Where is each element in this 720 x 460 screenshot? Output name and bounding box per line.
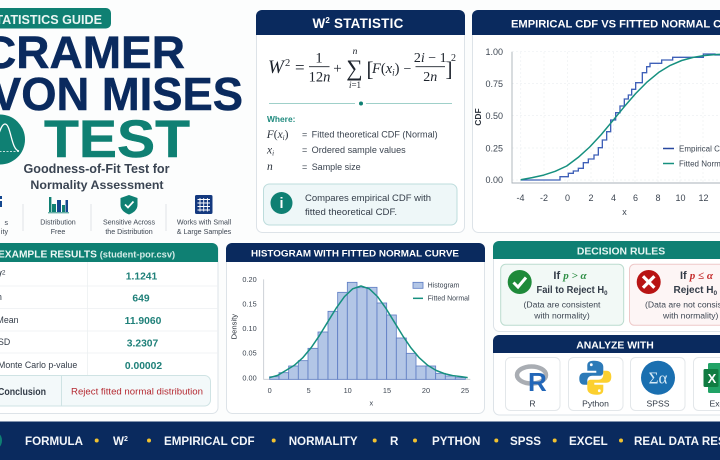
panel: histogram [226, 243, 485, 414]
rule: reject: with normality) [662, 310, 719, 320]
tool: SPSS: SPSS [647, 398, 670, 408]
feature: normality partial: s [4, 219, 8, 227]
title [0, 27, 243, 169]
rule: fail to reject: with normality) [533, 310, 590, 320]
x axis labels: -4 [516, 193, 525, 203]
subtitle: Goodness-of-Fit Test for [24, 162, 170, 176]
heading: empirical CDF vs fitted normal [472, 10, 720, 35]
feature: sensitive across the distribution: the Distribution [105, 228, 153, 236]
callout: compares CDFs [264, 184, 457, 225]
chart legend [663, 144, 720, 168]
formula: ] [446, 57, 452, 81]
results values: 1.1241 [126, 272, 158, 282]
banner keywords: W [113, 435, 124, 448]
y axis labels: 0.00 [485, 175, 503, 185]
x axis labels [268, 386, 469, 407]
y axis labels: 1.00 [485, 47, 503, 57]
tool: SPSS: Σα [649, 368, 667, 388]
y axis labels [242, 275, 257, 382]
where legend: i [283, 134, 285, 142]
formula: W [268, 57, 286, 78]
formula: 1 [315, 50, 323, 66]
where legend [266, 114, 438, 173]
tool: Python [568, 358, 623, 410]
histogram chart [230, 275, 470, 407]
formula: + [333, 61, 342, 77]
y axis labels: 0.20 [242, 275, 257, 284]
x axis labels: 8 [655, 193, 661, 203]
banner keywords [25, 435, 720, 448]
x axis labels: 20 [422, 386, 430, 395]
heading: histogram with fitted normal curve [226, 243, 485, 262]
badge: statistics guide [0, 8, 111, 28]
x axis labels: 12 [698, 193, 709, 203]
callout: compares CDFs: i [279, 196, 284, 212]
results rows: Monte Carlo p-value [0, 360, 77, 370]
formula: F(x [372, 61, 392, 77]
formula: i=1 [349, 80, 361, 90]
y axis labels: 0.25 [485, 144, 503, 154]
heading: example results: EXAMPLE RESULTS (student-por.csv) [0, 250, 175, 260]
feature: distribution free: Free [51, 228, 65, 236]
where legend: = [302, 130, 307, 140]
x axis labels: x [369, 398, 373, 407]
rule: fail to reject [501, 264, 624, 325]
rule: reject: 0 [714, 290, 718, 297]
y axis labels: 0.50 [485, 111, 503, 121]
y axis labels: 0.15 [242, 300, 257, 309]
heading: W2 statistic: STATISTIC [330, 16, 404, 31]
feature: sensitive across the distribution [103, 195, 155, 236]
heading: example results [0, 243, 218, 262]
heading: decision rules [493, 241, 720, 259]
feature: small and large samples [177, 195, 232, 236]
panel: W2 statistic [256, 10, 465, 232]
panel: empirical CDF chart [472, 10, 720, 232]
feature: small and large samples: & Large Samples [177, 228, 232, 236]
where legend: Ordered sample values [312, 145, 406, 155]
heading: W2 statistic: 2 [325, 16, 330, 25]
x axis labels: 5 [307, 386, 311, 395]
legend: Histogram [428, 283, 460, 290]
line chart: CDF: CDF [473, 108, 483, 126]
formula: 12n [309, 70, 330, 86]
x axis labels: 4 [611, 193, 616, 203]
rule: fail to reject: Fail to Reject H [536, 285, 609, 296]
where legend: = [302, 145, 307, 155]
where legend: Where: [267, 114, 295, 124]
rule: reject: Reject H [674, 285, 714, 296]
subtitle: Normality Assessment [30, 178, 164, 192]
footer banner [0, 422, 720, 460]
x axis labels: 2 [588, 193, 594, 203]
where legend: Fitted theoretical CDF (Normal) [312, 130, 438, 140]
formula: ) [395, 61, 400, 77]
x axis labels [516, 193, 709, 217]
where legend: n [267, 161, 273, 173]
results rows [0, 269, 77, 370]
panel: analyze with [493, 335, 720, 415]
banner keywords: FORMULA [25, 435, 84, 448]
heading: analyze with: ANALYZE WITH [576, 340, 654, 352]
histogram chart: Density [230, 314, 239, 339]
heading: decision rules: DECISION RULES [577, 246, 665, 258]
feature: distribution free [40, 197, 76, 236]
x axis labels: 0 [565, 193, 570, 203]
where legend: ) [285, 129, 289, 141]
results rows: 2 [2, 270, 6, 276]
tool: SPSS [630, 358, 685, 410]
formula: i [392, 68, 395, 78]
where legend: Sample size [312, 162, 361, 172]
formula: − [404, 62, 412, 77]
tool: R [506, 358, 560, 410]
fitted normal curve [269, 286, 468, 378]
formula: 2i − 1 [414, 51, 447, 66]
banner keywords: 2 [124, 436, 128, 443]
rule: reject [630, 264, 720, 325]
callout: compares CDFs: fitted theoretical CDF. [305, 207, 397, 218]
empirical step line [521, 54, 720, 180]
y axis labels: 0.00 [242, 373, 257, 382]
x axis labels: 15 [383, 386, 391, 395]
histogram bars [270, 282, 465, 379]
tool: R: R [529, 398, 536, 408]
x axis labels: 6 [633, 193, 638, 203]
formula: = [295, 58, 305, 77]
x axis labels: 10 [344, 386, 352, 395]
tool: Python: Python [582, 398, 609, 408]
legend: Fitted Normal [428, 296, 470, 303]
banner separators [95, 438, 623, 442]
results values: 3.2307 [127, 338, 159, 350]
results values: 649 [132, 294, 150, 304]
results values: 11.9060 [125, 316, 162, 327]
heading: W2 statistic [256, 10, 465, 35]
banner keywords: R [390, 435, 399, 448]
where legend: i [272, 150, 274, 158]
feature: sensitive across the distribution: Sensitive Across [103, 218, 155, 226]
formula [268, 47, 456, 90]
x axis labels: -2 [540, 193, 548, 203]
heading: histogram with fitted normal curve: HISTOGRAM WITH FITTED NORMAL CURVE [251, 248, 460, 260]
formula: 2 [451, 53, 456, 64]
banner keywords: NORMALITY [289, 435, 358, 448]
banner keywords: EMPIRICAL CDF [164, 435, 255, 448]
feature row [0, 195, 232, 236]
where legend: x [267, 144, 272, 156]
x axis labels: x [622, 207, 627, 217]
line chart: CDF [473, 47, 720, 217]
rule: reject: If p ≤ α [680, 270, 714, 282]
fitted normal curve [521, 54, 720, 180]
title: TEST [44, 110, 190, 169]
x axis labels: 0 [268, 386, 272, 395]
feature: small and large samples: Works with Small [177, 218, 232, 226]
conclusion: Reject fitted normal distribution [71, 386, 203, 396]
formula: 2 [285, 58, 290, 69]
formula: [ [366, 57, 374, 81]
subtitle [24, 162, 170, 192]
panel: example results [0, 243, 218, 414]
y axis labels: 0.05 [242, 349, 257, 358]
results values [125, 272, 162, 372]
formula: ∑ [346, 56, 363, 80]
rule: fail to reject: (Data are consistent [524, 300, 601, 310]
rule: fail to reject: 0 [604, 290, 608, 297]
feature: normality partial [0, 196, 8, 236]
y axis labels: 0.75 [485, 79, 503, 89]
rule: fail to reject: If p > α [553, 270, 587, 282]
tool: R: R [528, 367, 547, 397]
tool: Excel [694, 358, 720, 410]
where legend: = [302, 162, 307, 172]
y axis labels [485, 47, 503, 185]
results values: 0.00002 [125, 361, 162, 372]
heading: analyze with [493, 335, 720, 353]
tool: Excel: X [708, 371, 717, 386]
panel: decision rules [493, 241, 720, 332]
formula: n [353, 47, 358, 57]
feature: normality partial: ity [1, 228, 8, 236]
x axis labels: 10 [675, 193, 686, 203]
where legend: F(x [267, 129, 283, 141]
feature: distribution free: Distribution [40, 218, 76, 226]
banner keywords: SPSS [510, 435, 541, 448]
x axis labels: 25 [461, 386, 469, 395]
callout: compares CDFs: Compares empirical CDF with [305, 193, 431, 204]
banner keywords: PYTHON [432, 435, 480, 448]
conclusion [0, 376, 210, 406]
icon: bell curve badge [0, 114, 25, 164]
heading: W2 statistic: W [312, 16, 325, 31]
formula: 2n [423, 70, 437, 85]
y axis labels: 0.10 [242, 324, 257, 333]
banner keywords: EXCEL [569, 435, 608, 448]
legend [413, 282, 470, 303]
